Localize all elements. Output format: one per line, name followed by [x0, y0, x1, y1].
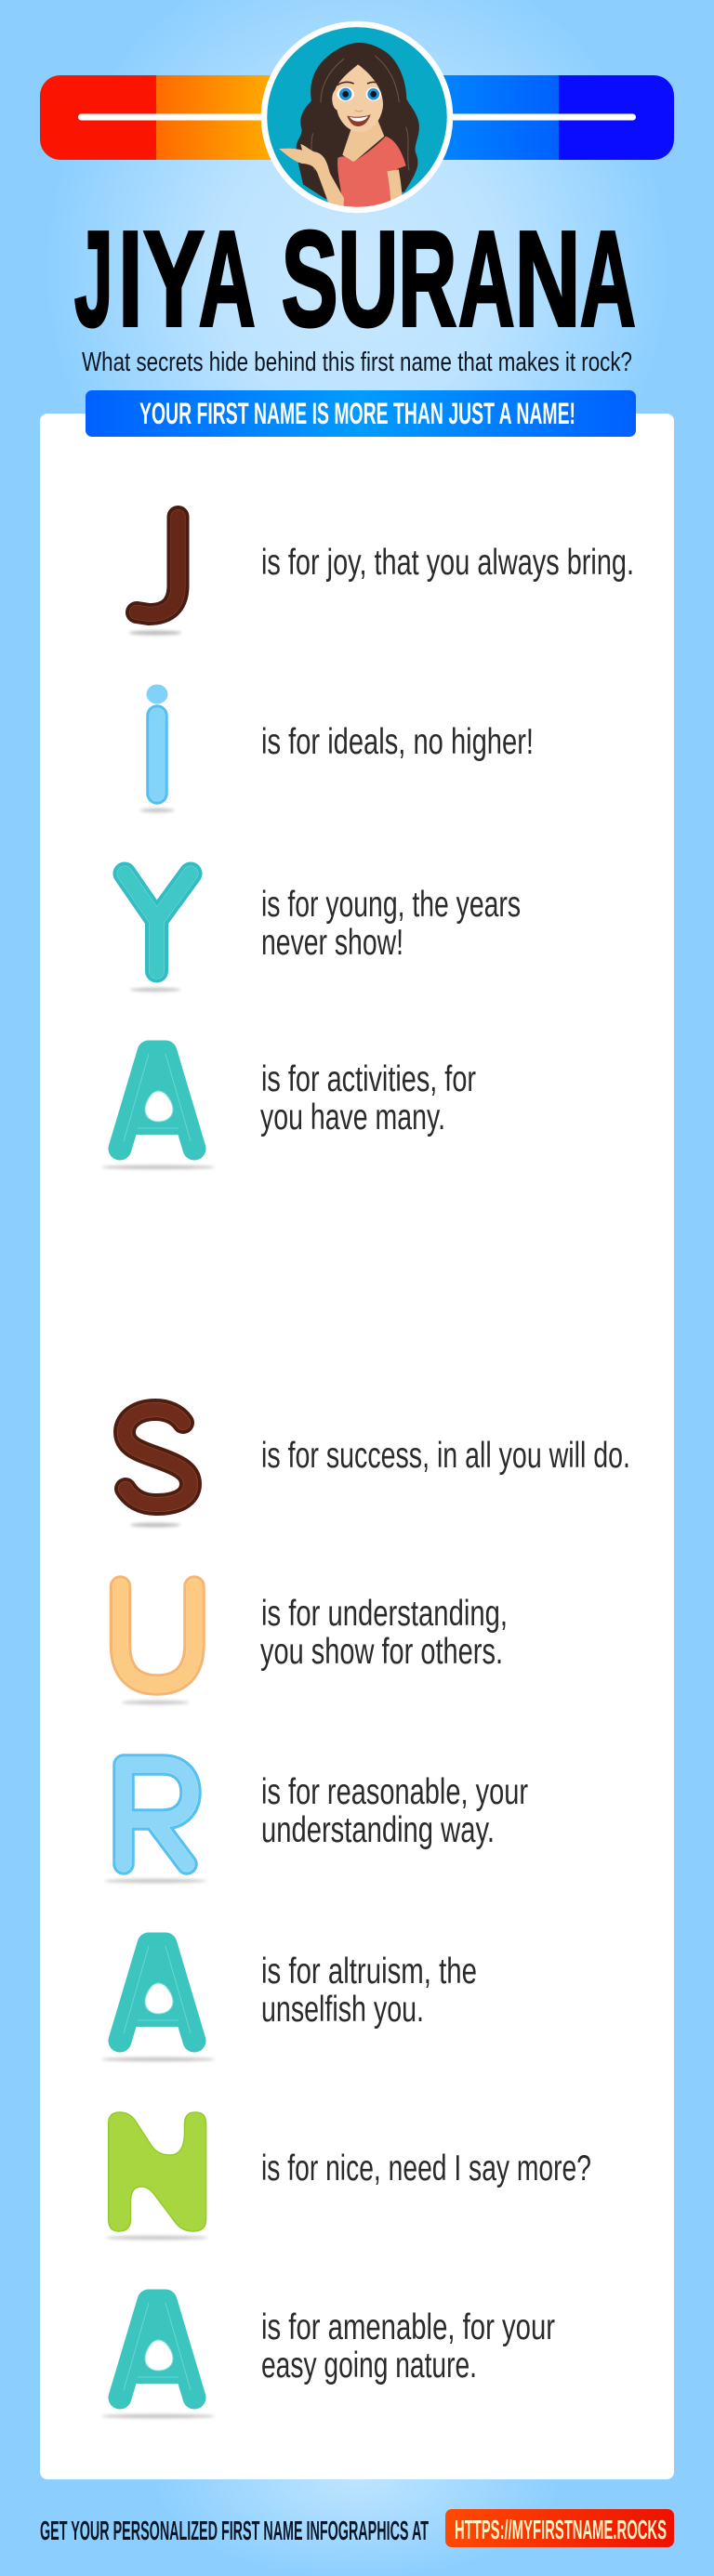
row: Y	[125, 874, 521, 992]
shirt	[337, 137, 406, 211]
row: I	[140, 684, 534, 812]
text	[261, 2307, 555, 2385]
neck and chest	[342, 121, 384, 163]
text: is for young, the years	[261, 885, 521, 925]
text: is for altruism, the	[261, 1952, 477, 1991]
raised arm and hand	[279, 144, 344, 207]
row: U	[121, 1586, 508, 1704]
row: N	[106, 2112, 591, 2240]
title: Y	[143, 203, 205, 354]
text	[260, 1059, 476, 1137]
title: U	[337, 203, 398, 354]
row: J	[129, 517, 634, 636]
letter I	[140, 684, 174, 812]
letter A	[101, 1944, 215, 2061]
hair	[297, 43, 419, 199]
title: S	[282, 203, 338, 354]
right arm	[393, 170, 397, 207]
left eye	[337, 87, 354, 101]
footer url button	[445, 2509, 674, 2547]
text: you show for others.	[260, 1632, 503, 1672]
text: you have many.	[260, 1097, 445, 1137]
row: A (altruism)	[101, 1944, 477, 2061]
text	[261, 1952, 477, 2030]
banner	[86, 390, 636, 437]
title: I	[118, 203, 142, 354]
text: easy going nature.	[261, 2346, 477, 2385]
text: is for ideals, no higher!	[261, 722, 534, 762]
text	[260, 1594, 508, 1672]
avatar portrait	[264, 24, 450, 211]
text: is for understanding,	[261, 1594, 508, 1634]
white content panel	[40, 414, 674, 2479]
mouth	[347, 114, 371, 126]
right eye	[365, 87, 381, 101]
text: is for reasonable, your	[261, 1772, 528, 1812]
text: is for amenable, for your	[261, 2307, 555, 2347]
letter J	[129, 517, 181, 636]
row: S	[125, 1410, 630, 1527]
header gradient bar	[40, 75, 674, 160]
title: A	[458, 203, 515, 354]
title: R	[398, 203, 456, 354]
row: R	[104, 1765, 528, 1883]
text: unselfish you.	[261, 1990, 424, 2030]
nose	[355, 111, 363, 112]
letter A	[101, 2301, 215, 2418]
row: A (activities)	[101, 1052, 476, 1169]
letter R	[104, 1765, 206, 1883]
text: never show!	[261, 923, 403, 963]
title: J	[74, 203, 112, 354]
title: A	[199, 203, 256, 354]
letter U	[121, 1586, 194, 1704]
face	[332, 64, 383, 132]
title	[74, 203, 636, 354]
letter S	[125, 1410, 191, 1527]
row: A (amenable)	[101, 2301, 555, 2418]
letter A	[101, 1052, 215, 1169]
hair highlights	[311, 56, 409, 170]
eyebrows	[337, 82, 379, 85]
letter Y	[125, 874, 191, 992]
text: is for nice, need I say more?	[261, 2149, 591, 2188]
text: is for activities, for	[261, 1059, 476, 1099]
text: understanding way.	[261, 1810, 495, 1850]
text	[261, 885, 521, 963]
letter N	[106, 2112, 208, 2240]
title: A	[580, 203, 636, 354]
text	[261, 1772, 528, 1850]
title: N	[515, 203, 580, 354]
